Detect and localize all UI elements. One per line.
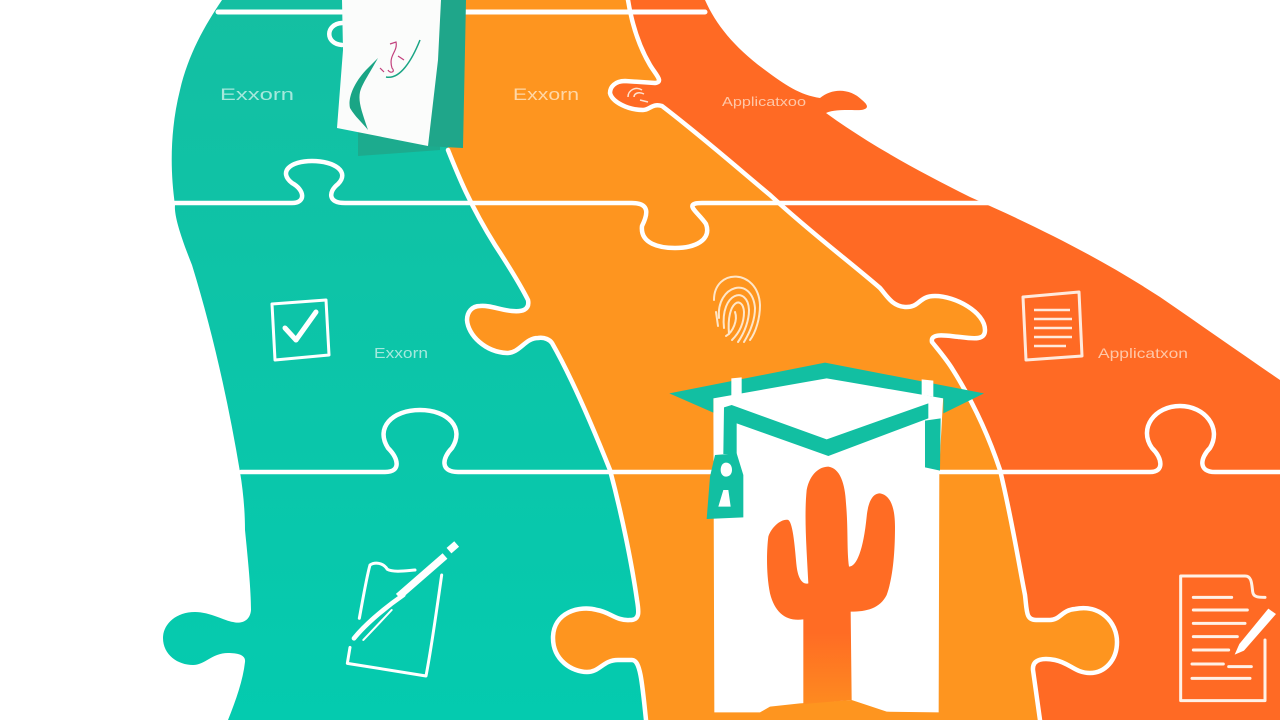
panel: teal puzzle column — [163, 0, 646, 720]
tassel — [707, 453, 743, 519]
small swirl icon — [628, 88, 648, 102]
label: application middle: Applicatxon — [1098, 345, 1188, 361]
label: exam teal: Exxorn — [220, 85, 294, 104]
label: exam orange: Exxorn — [513, 85, 579, 104]
icon: graduation cap over cactus banner — [669, 363, 984, 712]
cap strap — [723, 403, 941, 471]
icon: checkbox — [272, 300, 329, 360]
cactus — [767, 467, 895, 704]
cap white stripes — [731, 377, 933, 397]
label: exam middle: Exxorn — [374, 345, 428, 362]
icon: document — [1023, 292, 1082, 360]
cap top band — [669, 363, 984, 413]
white banner — [713, 373, 943, 712]
icon: pencil and note — [347, 544, 457, 676]
icon: fingerprint — [714, 277, 760, 342]
icon: document with pen — [1181, 576, 1276, 701]
panel: orange-red puzzle column — [560, 0, 1280, 720]
panel: orange puzzle column — [420, 0, 1117, 720]
paper note with signature — [337, 0, 466, 156]
label: application top: Applicatxoo — [722, 94, 806, 109]
